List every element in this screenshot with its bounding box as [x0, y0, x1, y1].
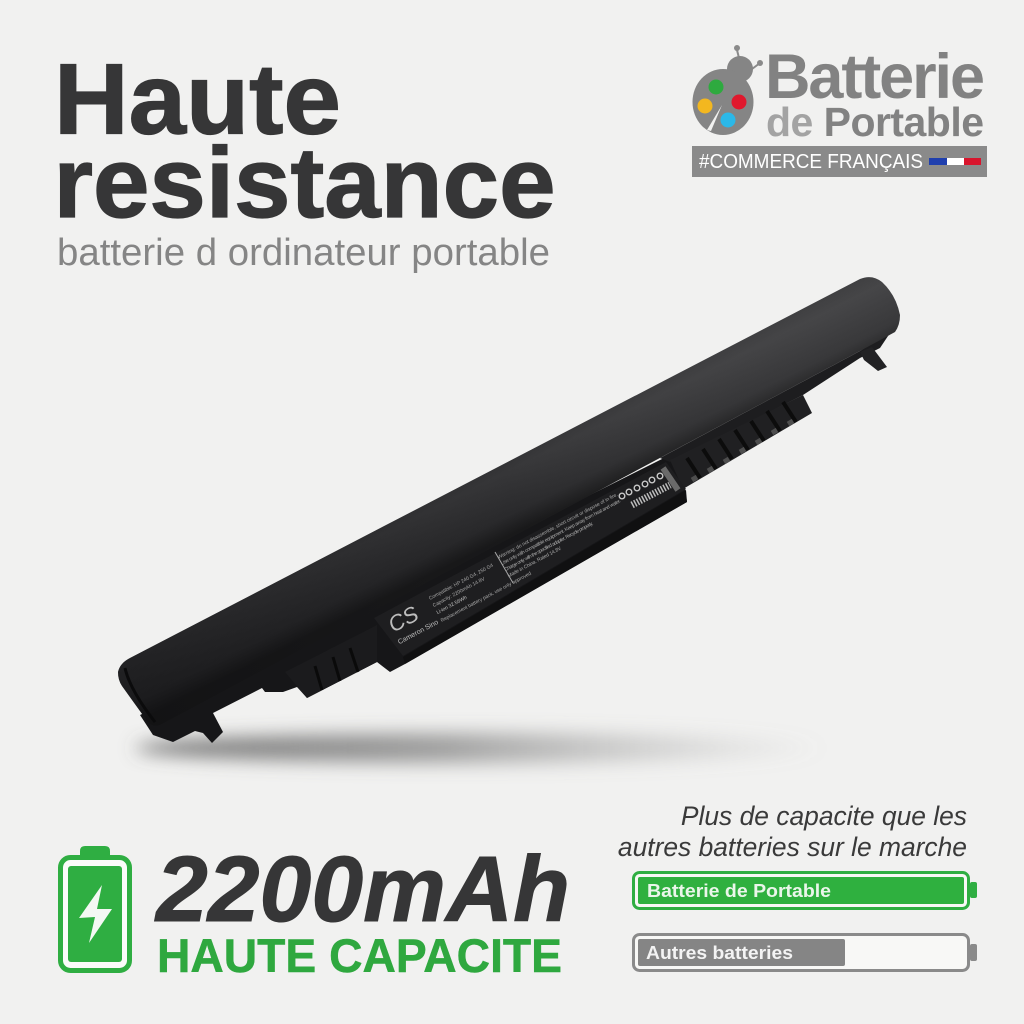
label specification text: Made in China. Rated 14.8V — [507, 545, 563, 579]
label specification text: Capacity: 2200mAh 14.8V — [432, 576, 487, 609]
label brand mark: Cameron Sino — [397, 619, 440, 646]
capacity caption: HAUTE CAPACITE — [157, 929, 562, 982]
comparison bar: Batterie de Portable: Batterie de Portable — [647, 881, 831, 901]
ground shadow — [135, 733, 825, 763]
end cap highlight — [125, 668, 155, 722]
label panel — [374, 462, 687, 664]
banner: commerce français — [692, 146, 987, 177]
comparison text: autres batteries sur le marche — [618, 832, 967, 862]
right clip — [860, 347, 887, 371]
label barcode — [632, 485, 670, 505]
title — [54, 44, 556, 239]
icon: green battery with bolt — [60, 846, 130, 970]
icon: ladybug palette — [692, 45, 763, 135]
label specification text: Use only with compatible equipment. Keep away from heat and water. — [500, 498, 622, 567]
connector rib highlights — [692, 421, 793, 480]
title: Haute — [54, 44, 341, 156]
body cylinder — [118, 277, 900, 726]
title: resistance — [54, 127, 556, 239]
comparison bar: Batterie de Portable — [634, 872, 977, 908]
logo wordmark — [765, 42, 985, 145]
label specification text: Charge only with the specified adapter. Recycle properly. — [503, 521, 595, 573]
laptop battery product — [118, 277, 900, 743]
banner: commerce français: #COMMERCE FRANÇAIS — [699, 151, 923, 173]
label specification text: Li-ion 32.56Wh — [436, 595, 468, 616]
connector ribs right — [687, 402, 796, 478]
connector ribs left — [315, 648, 358, 690]
connector tab right — [670, 395, 812, 489]
label specification text: Compatible: HP 240 G4, 250 G4 — [428, 563, 495, 602]
logo wordmark: Batterie — [765, 42, 985, 112]
comparison bar: Autres batteries — [634, 934, 977, 970]
comparison text — [618, 801, 967, 862]
capacity value: 2200mAh — [154, 837, 570, 941]
comparison bar: Autres batteries: Autres batteries — [646, 943, 793, 963]
logo: Batterie de Portable — [692, 42, 987, 177]
logo wordmark: de Portable — [766, 99, 984, 145]
label certification symbols — [619, 473, 663, 499]
connector tab left — [285, 625, 377, 698]
subtitle: batterie d ordinateur portable — [57, 232, 550, 274]
comparison text: Plus de capacite que les — [681, 801, 967, 831]
label brand mark — [384, 594, 440, 646]
label specification text: Replacement battery pack, use only approved — [440, 571, 533, 624]
body shading — [118, 277, 900, 726]
label brand mark: CS — [384, 601, 423, 637]
battery lower housing and left clip — [140, 455, 687, 743]
label specification text — [426, 492, 633, 624]
label specification text: Warning: do not disassemble, short circuit or dispose of in fire. — [497, 492, 619, 561]
battery right strip — [660, 330, 892, 462]
